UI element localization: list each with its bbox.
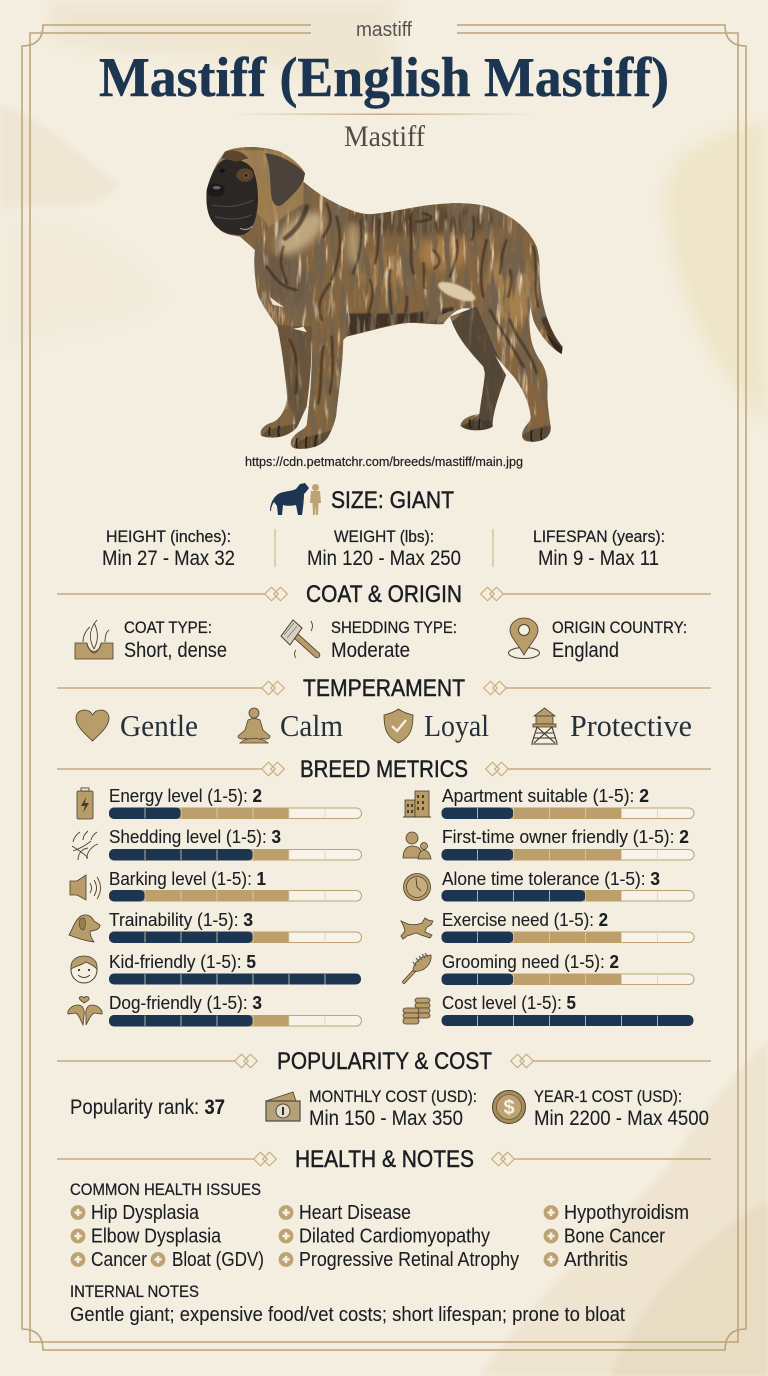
metric: shedding level — [72, 826, 362, 860]
icon: grooming brush — [404, 953, 431, 982]
metric: first-time owner friendly — [403, 826, 694, 860]
icon: heart — [76, 710, 109, 741]
temperament: calm — [238, 708, 343, 743]
stat: lifespan — [533, 527, 665, 570]
illustration: brindle mastiff — [206, 147, 563, 449]
shedding type: Moderate — [331, 639, 410, 662]
icon: dollar coin: $ — [503, 1097, 515, 1119]
coat type: Short, dense — [124, 639, 227, 662]
monthly cost — [266, 1087, 477, 1130]
title underline — [232, 114, 536, 115]
common health issues: Progressive Retinal Atrophy — [299, 1249, 519, 1271]
metric: dog-friendly: Dog-friendly (1-5): 3 — [109, 992, 262, 1013]
shedding type — [281, 618, 457, 662]
head — [210, 150, 303, 227]
common health issues: Bone Cancer — [564, 1226, 665, 1248]
icon: shedding brush — [281, 620, 317, 658]
icon: dollar coin — [492, 1090, 526, 1124]
stat: weight: Min 120 - Max 250 — [307, 547, 461, 570]
metric: trainability — [69, 909, 362, 943]
temperament: calm: Calm — [280, 708, 343, 743]
temperament: loyal: Loyal — [424, 708, 489, 743]
icon: map pin — [508, 618, 540, 658]
top tag: mastiff — [356, 19, 412, 41]
common health issues: Cancer — [91, 1249, 147, 1271]
icon: owner and dog — [403, 832, 431, 859]
temperament: loyal — [384, 708, 489, 743]
coat type: COAT TYPE: — [124, 618, 212, 637]
origin country — [508, 618, 687, 662]
icon: dog silhouette — [270, 483, 309, 515]
metric: grooming need — [404, 951, 694, 985]
year-1 cost — [492, 1087, 709, 1130]
stat: weight — [307, 527, 461, 570]
icon: person silhouette — [310, 484, 321, 515]
metric: trainability: Trainability (1-5): 3 — [109, 909, 253, 930]
origin country: England — [552, 639, 619, 662]
coat type — [75, 618, 227, 662]
metric: dog-friendly — [68, 992, 361, 1026]
year-1 cost: Min 2200 - Max 4500 — [534, 1107, 709, 1130]
metric: barking level: Barking level (1-5): 1 — [109, 868, 266, 889]
metric: alone time tolerance — [404, 868, 694, 902]
icon: battery — [77, 788, 93, 819]
metric: grooming need: Grooming need (1-5): 2 — [442, 951, 619, 972]
heading: breed metrics — [57, 756, 711, 783]
icon: banknotes — [266, 1092, 300, 1121]
stat: lifespan: Min 9 - Max 11 — [538, 547, 659, 570]
heading: coat and origin: COAT & ORIGIN — [306, 581, 462, 608]
icon: shield with check — [384, 709, 413, 743]
metric: shedding level: Shedding level (1-5): 3 — [109, 826, 281, 847]
stat: weight: WEIGHT (lbs): — [334, 527, 434, 546]
stat: height — [102, 527, 235, 570]
heading: popularity and cost — [57, 1048, 711, 1075]
common health issues: Elbow Dysplasia — [91, 1226, 222, 1248]
metric: energy level: Energy level (1-5): 2 — [109, 785, 262, 806]
metric: energy level — [77, 785, 362, 819]
metric: kid-friendly: Kid-friendly (1-5): 5 — [109, 951, 256, 972]
icon: dog head — [69, 915, 100, 942]
paws — [269, 418, 542, 449]
icon: kid face — [71, 956, 97, 983]
heading: health and notes: HEALTH & NOTES — [295, 1146, 474, 1173]
year-1 cost: YEAR-1 COST (USD): — [534, 1087, 682, 1106]
common health issues: Dilated Cardiomyopathy — [299, 1226, 490, 1248]
metric: exercise need — [401, 909, 694, 943]
heading: popularity and cost: POPULARITY & COST — [277, 1048, 492, 1075]
origin country: ORIGIN COUNTRY: — [552, 618, 687, 637]
common health issues: Hip Dysplasia — [91, 1202, 200, 1224]
stat: height: Min 27 - Max 32 — [102, 547, 235, 570]
internal notes — [70, 1282, 625, 1326]
metric: kid-friendly — [71, 951, 361, 984]
heading: breed metrics: BREED METRICS — [300, 756, 468, 783]
stat: lifespan: LIFESPAN (years): — [533, 527, 665, 546]
icon: watch tower — [531, 708, 558, 744]
metric: cost level — [403, 992, 694, 1026]
common health issues: Heart Disease — [299, 1202, 411, 1224]
heading: health and notes — [57, 1146, 711, 1173]
stat: height: HEIGHT (inches): — [106, 527, 231, 546]
metric: apartment suitable: Apartment suitable (1-5): 2 — [442, 785, 649, 806]
subtitle: Mastiff — [344, 120, 425, 153]
common health issues: Bloat (GDV) — [172, 1249, 264, 1271]
common health issues: Hypothyroidism — [564, 1202, 689, 1224]
icon: apartment buildings — [403, 791, 431, 817]
metric: alone time tolerance: Alone time tolerance (1-5): 3 — [442, 868, 660, 889]
icon: two dogs with heart — [68, 996, 102, 1025]
common health issues: Arthritis — [564, 1249, 628, 1271]
heading: coat and origin — [57, 581, 711, 608]
size section — [270, 483, 454, 515]
temperament: protective: Protective — [570, 708, 692, 743]
temperament: gentle — [76, 708, 198, 743]
temperament: gentle: Gentle — [120, 708, 198, 743]
image url caption: https://cdn.petmatchr.com/breeds/mastiff/main.jpg — [245, 454, 523, 469]
metric: barking level — [70, 868, 362, 902]
icon: hair follicle — [75, 620, 113, 659]
internal notes: Gentle giant; expensive food/vet costs; short lifespan; prone to bloat — [70, 1304, 625, 1326]
metric: apartment suitable — [403, 785, 694, 819]
icon: running dog — [401, 918, 433, 939]
icon: speaker — [70, 875, 100, 900]
heading: temperament: TEMPERAMENT — [303, 675, 465, 702]
monthly cost: MONTHLY COST (USD): — [309, 1087, 477, 1106]
icon: coin stacks — [403, 998, 430, 1024]
heading: temperament — [57, 675, 711, 702]
icon: meditating person — [238, 708, 270, 743]
title: Mastiff (English Mastiff) — [99, 47, 669, 109]
common health issues — [70, 1180, 689, 1271]
metric: first-time owner friendly: First-time owner friendly (1-5): 2 — [442, 826, 689, 847]
icon: clock — [404, 874, 430, 900]
size heading: SIZE: GIANT — [331, 487, 454, 514]
metric: cost level: Cost level (1-5): 5 — [442, 992, 576, 1013]
internal notes: INTERNAL NOTES — [70, 1282, 199, 1301]
shedding type: SHEDDING TYPE: — [331, 618, 457, 637]
metric: exercise need: Exercise need (1-5): 2 — [442, 909, 608, 930]
icon: shedding hairs — [72, 831, 98, 860]
monthly cost: Min 150 - Max 350 — [309, 1107, 463, 1130]
common health issues: COMMON HEALTH ISSUES — [70, 1180, 261, 1199]
popularity rank: Popularity rank: 37 — [70, 1096, 225, 1119]
